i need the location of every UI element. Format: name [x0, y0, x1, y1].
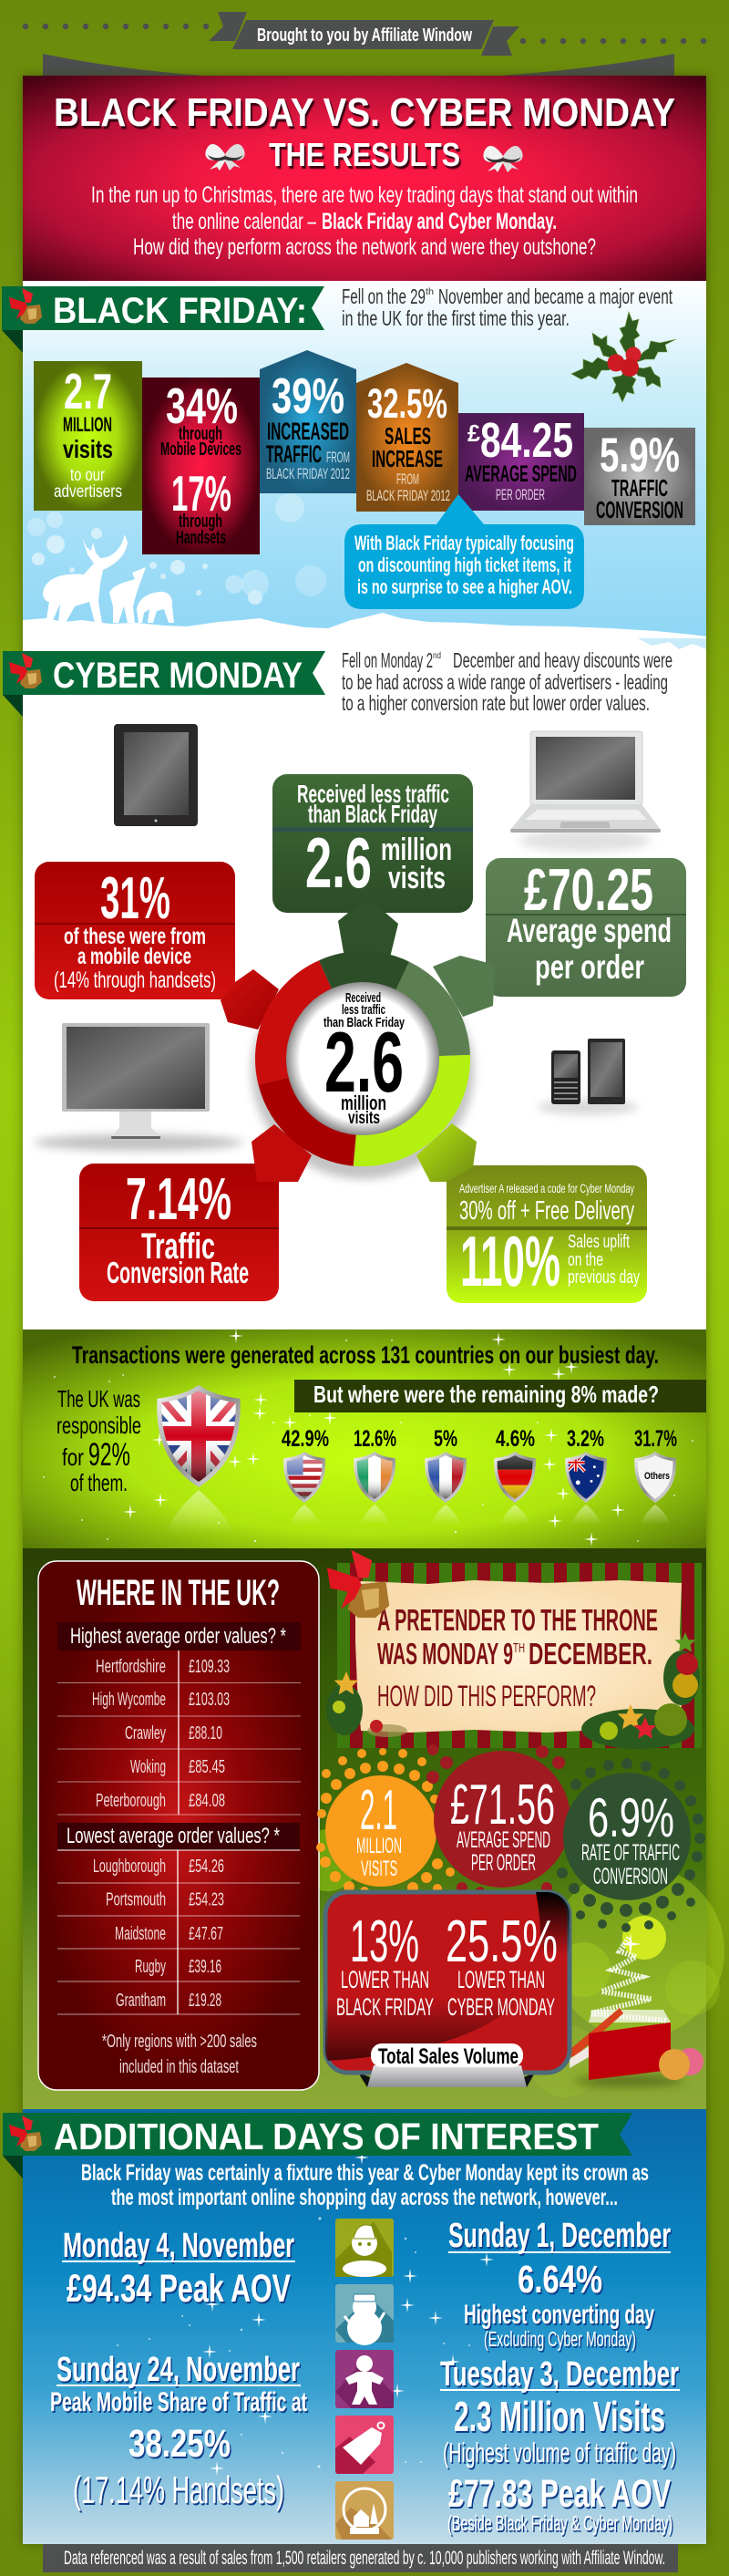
cyber monday description [342, 648, 673, 715]
country: Others: Others [644, 1471, 670, 1482]
stat: average spend: AVERAGE SPEND [465, 461, 577, 487]
stat: mobile devices: through [179, 512, 222, 532]
stat box: 2.6 million visits: than Black Friday [308, 800, 437, 828]
header panel [23, 76, 706, 281]
lower than cyber monday: 25.5% [446, 1908, 558, 1974]
stat box: free delivery code: Advertiser A released a code for Cyber Monday [459, 1181, 634, 1195]
country: USA [282, 1426, 329, 1525]
ribbon dots right [520, 38, 706, 44]
ring segment: mobile [255, 960, 332, 1085]
centre dial text: Received [345, 990, 381, 1006]
stat: sales increase: SALES [385, 422, 431, 450]
uk share text: of them. [70, 1469, 128, 1496]
lowest values rows: £54.26 [189, 1857, 224, 1877]
country: Australia: 3.2% [567, 1426, 604, 1452]
decorative dots [316, 1744, 705, 1932]
icon: bell with bow [9, 288, 42, 324]
icon: price tag [335, 2416, 394, 2474]
callout: aov explanation: With Black Friday typically focusing [354, 532, 574, 554]
callout: aov explanation: is no surprise to see a higher AOV. [357, 575, 572, 598]
stat: 2.7 million visits: visits [63, 435, 113, 463]
stat box: mobile device share: 31% [100, 864, 170, 931]
stat: average spend: 84.25 [480, 413, 573, 468]
icon: uk shield [157, 1385, 241, 1487]
stat circle: 2.1 million visits [325, 1775, 436, 1887]
stat: traffic conversion: TRAFFIC [611, 474, 668, 502]
subtitle: THE RESULTS [269, 136, 460, 173]
stat circle: average spend: AVERAGE SPEND [457, 1827, 550, 1853]
panel: where in the uk and pretender [23, 1548, 724, 2109]
ribbon shapes [209, 12, 519, 56]
banner title: BLACK FRIDAY: [53, 291, 307, 331]
lowest values rows: £39.16 [189, 1957, 221, 1977]
ring segment: spend [395, 962, 470, 1056]
country: Ireland [354, 1426, 396, 1525]
stat box: 2.6 million visits [272, 774, 473, 913]
stat box: free delivery code: previous day [568, 1267, 640, 1288]
stat: 2.7 million visits: advertisers [54, 482, 122, 502]
icon: bell with bow [9, 653, 42, 688]
stat circle: average spend: PER ORDER [471, 1850, 536, 1876]
icon: snowman [335, 2284, 394, 2345]
snow ridge [23, 613, 706, 649]
pretender banner [326, 1550, 702, 1749]
lowest values header [57, 1823, 300, 1850]
centre dial text: than Black Friday [323, 1015, 405, 1030]
day: monday 4 november: Monday 4, November [63, 2227, 294, 2265]
stat circle: conversion [563, 1773, 691, 1900]
stat: mobile devices: 34% [166, 378, 238, 434]
lower than cyber monday [446, 1908, 558, 2021]
stat box: mobile device share: (14% through handsets) [54, 967, 216, 993]
day: sunday 1 december [448, 2217, 671, 2351]
centre dial text: million [341, 1091, 386, 1114]
ring segment: delivery [354, 1055, 470, 1166]
banner: black friday [2, 286, 324, 353]
stat box: conversion rate: Traffic [141, 1226, 215, 1267]
country: USA: 42.9% [282, 1426, 329, 1452]
icon: snow globe [335, 2481, 394, 2540]
ribbon body [367, 2065, 527, 2087]
panel: total sales volume [325, 1892, 570, 2087]
lowest values rows: £54.23 [189, 1889, 224, 1909]
banner: additional days [3, 2113, 632, 2178]
uk share text: responsible [56, 1412, 141, 1439]
stat: mobile devices: 17% [171, 465, 231, 522]
country: Others: 31.7% [634, 1426, 677, 1452]
gear tooth: top [338, 897, 398, 957]
icon: reindeer silhouettes [43, 534, 174, 625]
uk share text: The UK was [57, 1385, 140, 1412]
uk share text: 92% [88, 1437, 130, 1473]
stat circle: 2.1 million visits: 2.1 [360, 1779, 397, 1842]
black friday description: in the UK for the first time this year. [342, 306, 570, 330]
day: sunday 1 december: (Excluding Cyber Monday) [484, 2327, 636, 2351]
highest values rows [57, 1650, 301, 1815]
stat: sales increase: 32.5% [367, 380, 447, 427]
bokeh background [297, 1829, 724, 2097]
lowest values header: Lowest average order values? * [67, 1824, 280, 1848]
stat: mobile devices: Mobile Devices [160, 440, 241, 460]
callout: aov explanation [344, 494, 584, 609]
gear tooth: bottom right [416, 1123, 477, 1182]
lowest values rows: £47.67 [189, 1924, 223, 1944]
intro paragraph [91, 182, 638, 260]
ribbon tails [358, 2073, 535, 2087]
sparkles [43, 1329, 693, 1547]
stat: sales increase: FROM [396, 471, 419, 488]
ribbon label [371, 2043, 523, 2069]
pretender text: TH [513, 1640, 525, 1656]
stat: mobile devices [142, 378, 260, 554]
stat box: conversion rate [79, 1164, 279, 1301]
highest values rows: £88.10 [189, 1723, 222, 1743]
icon: right bow [483, 146, 523, 172]
icon: monitor [34, 1023, 243, 1151]
stat circle: average spend: £71.56 [450, 1774, 555, 1836]
stat: increased traffic [260, 350, 356, 493]
pretender text: WAS MONDAY 9 [377, 1637, 513, 1671]
stat: increased traffic: BLACK FRIDAY 2012 [266, 465, 350, 482]
stat box: mobile device share: of these were from [64, 924, 206, 949]
lowest values rows [57, 1850, 300, 2014]
stat: sales increase: INCREASE [372, 445, 443, 472]
panel: additional days of interest [3, 2109, 706, 2544]
lowest values rows: Portsmouth [106, 1889, 166, 1909]
sales box [325, 1892, 570, 2073]
stat circle: 2.1 million visits: VISITS [361, 1857, 397, 1881]
christmas ornaments right [581, 1632, 700, 1749]
sparkles [117, 2150, 494, 2476]
stat: 2.7 million visits: to our [70, 466, 106, 485]
stat box: average spend: £70.25 [524, 856, 653, 923]
day: monday 4 november [62, 2227, 295, 2311]
stat box: average spend: per order [535, 948, 644, 986]
stat box: free delivery code: 110% [460, 1221, 560, 1301]
centre dial text: 2.6 [324, 1014, 404, 1110]
snowflakes [27, 493, 326, 605]
country: France [426, 1426, 465, 1525]
stat: mobile devices: Handsets [176, 528, 226, 548]
stat box: free delivery code: on the [568, 1250, 603, 1270]
gear tooth: bottom left [252, 1124, 312, 1182]
day: tuesday 3 december [440, 2355, 680, 2535]
lower than black friday [336, 1908, 434, 2021]
stat box: conversion rate: Conversion Rate [107, 1256, 249, 1289]
lowest values rows: Rugby [135, 1957, 166, 1977]
banner title: CYBER MONDAY [53, 656, 303, 696]
lower than cyber monday: LOWER THAN [457, 1966, 545, 1993]
highest values rows: Peterborough [96, 1791, 166, 1811]
table footnote: *Only regions with >200 sales [102, 2032, 257, 2052]
day: sunday 1 december: 6.64% [518, 2258, 602, 2302]
stat circle: 2.1 million visits: MILLION [356, 1834, 402, 1858]
table footnote [102, 2032, 257, 2077]
highest values rows: Crawley [125, 1723, 166, 1743]
centre dial text: less traffic [342, 1002, 385, 1018]
country: Germany: 4.6% [496, 1426, 535, 1452]
country: Ireland: 12.6% [354, 1426, 396, 1452]
stat: average spend: PER ORDER [496, 486, 545, 503]
stat: average spend: £ [467, 419, 481, 447]
uk shield reflection [166, 1490, 233, 1534]
icon: laptop [510, 731, 661, 852]
ribbon dots left [23, 24, 209, 29]
centre dial [286, 982, 439, 1135]
icon: bell with bow [327, 1550, 389, 1618]
panel: cyber monday [3, 638, 706, 1329]
stat box: free delivery code [447, 1165, 647, 1303]
lowest values rows: £19.28 [189, 1991, 221, 2011]
highest values rows: £103.03 [189, 1690, 230, 1710]
icon: christmas baubles [659, 2048, 703, 2080]
paper [355, 1580, 683, 1733]
stat circle: average spend [434, 1751, 570, 1888]
stat: increased traffic: TRAFFIC [266, 440, 322, 468]
day: sunday 24 november [50, 2351, 307, 2511]
highest values rows: £85.45 [189, 1757, 225, 1777]
country: Others [634, 1426, 677, 1525]
highest values rows: Woking [130, 1757, 166, 1777]
gear tooth: left [221, 969, 279, 1029]
stat: 2.7 million visits [34, 361, 142, 511]
stat: 2.7 million visits: 2.7 [64, 363, 112, 419]
stat: traffic conversion: 5.9% [600, 429, 680, 482]
panel: black friday [2, 281, 706, 649]
pretender text [377, 1603, 658, 1712]
icon: mobile phones [538, 1039, 638, 1114]
lower than black friday: BLACK FRIDAY [336, 1993, 434, 2021]
black friday description: th [426, 287, 434, 297]
gear tooth: right [433, 956, 495, 1017]
stat box: 2.6 million visits: million [381, 833, 452, 867]
lowest values rows: Grantham [116, 1991, 166, 2011]
day: sunday 24 november: (17.14% Handsets) [73, 2468, 284, 2511]
highest values rows: £109.33 [189, 1657, 230, 1677]
table: where in the uk [38, 1561, 319, 2090]
stat: mobile devices: through [179, 424, 222, 444]
highest values rows: High Wycombe [92, 1690, 166, 1710]
ring segment: traffic [319, 951, 409, 990]
icon: gingerbread man [335, 2350, 394, 2408]
stat box: mobile device share [35, 862, 235, 999]
intro paragraph: the online calendar – [172, 209, 316, 234]
table title: WHERE IN THE UK? [77, 1573, 280, 1613]
footer [43, 2544, 678, 2572]
lowest values rows: Loughborough [93, 1857, 166, 1877]
highest values header: Highest average order values? * [70, 1624, 286, 1649]
stat: 2.7 million visits: MILLION [63, 413, 112, 436]
gray arcs behind header [43, 54, 674, 76]
lower than black friday: LOWER THAN [341, 1966, 429, 1993]
lowest values rows: Maidstone [115, 1924, 166, 1944]
country: France: 5% [434, 1426, 457, 1452]
ribbon label: Total Sales Volume [378, 2044, 519, 2069]
striped backing [337, 1563, 702, 1748]
day: sunday 24 november: Peak Mobile Share of Traffic at [50, 2387, 307, 2417]
icon: tablet [114, 724, 198, 826]
christmas ornaments left [326, 1671, 407, 1737]
uk share text: for [62, 1443, 84, 1471]
stat box: 2.6 million visits: 2.6 [305, 822, 372, 903]
callout: aov explanation: on discounting high ticket items, it [358, 553, 571, 576]
country: Germany [496, 1426, 535, 1525]
table footnote: included in this dataset [119, 2057, 239, 2077]
stat box: conversion rate: 7.14% [126, 1165, 231, 1232]
icon: holly [571, 312, 676, 402]
stat: sales increase [356, 363, 458, 512]
black friday description: Fell on the 29 [342, 284, 426, 308]
gear chart [221, 897, 495, 1182]
top sponsor ribbon [23, 12, 706, 56]
icon: bell with bow [9, 2116, 42, 2151]
stat: increased traffic: INCREASED [267, 418, 349, 445]
ring segment: conversion [259, 1077, 356, 1166]
stat box: free delivery code: 30% off + Free Delivery [459, 1196, 634, 1226]
stat box: mobile device share: a mobile device [77, 944, 191, 969]
black friday description [342, 284, 673, 330]
intro paragraph: Black Friday and Cyber Monday. [322, 209, 557, 234]
stat box: average spend [486, 856, 686, 997]
stat: traffic conversion [584, 428, 695, 525]
day: sunday 24 november: Sunday 24, November [56, 2351, 300, 2389]
icon: gift box and sparkling tree [570, 1933, 683, 2086]
stat circle: conversion: 6.9% [588, 1787, 674, 1848]
uk share text [56, 1385, 141, 1496]
stat: increased traffic: 39% [272, 367, 344, 424]
highest values header [57, 1622, 301, 1650]
lower than cyber monday: CYBER MONDAY [447, 1993, 555, 2021]
icon: left bow [205, 144, 245, 171]
stat box: free delivery code: Sales uplift [568, 1232, 630, 1252]
additional intro [81, 2160, 649, 2210]
centre dial text [323, 990, 405, 1128]
day: sunday 24 november: 38.25% [128, 2422, 231, 2466]
centre dial text: visits [348, 1109, 380, 1128]
stat: sales increase: BLACK FRIDAY 2012 [366, 487, 450, 504]
pretender text: DECEMBER. [529, 1637, 652, 1671]
stat box: 2.6 million visits: visits [388, 861, 446, 895]
lower than black friday: 13% [350, 1908, 419, 1974]
banner title: ADDITIONAL DAYS OF INTEREST [54, 2116, 599, 2157]
cyber monday description: nd [433, 651, 441, 661]
icon: elf [335, 2219, 394, 2277]
stat box: 2.6 million visits: Received less traffic [297, 780, 449, 808]
stat: increased traffic: FROM [326, 449, 350, 466]
cyber monday description: Fell on Monday 2 [342, 648, 433, 672]
country: Australia [567, 1426, 605, 1525]
panel: transactions by country [23, 1329, 706, 1548]
stat: average spend [458, 413, 584, 511]
ribbon text: Brought to you by Affiliate Window [257, 26, 472, 46]
highest values rows: £84.08 [189, 1791, 225, 1811]
day: monday 4 november: £94.34 Peak AOV [67, 2267, 291, 2311]
banner: cyber monday [3, 651, 325, 717]
highest values rows: Hertfordshire [96, 1657, 166, 1677]
